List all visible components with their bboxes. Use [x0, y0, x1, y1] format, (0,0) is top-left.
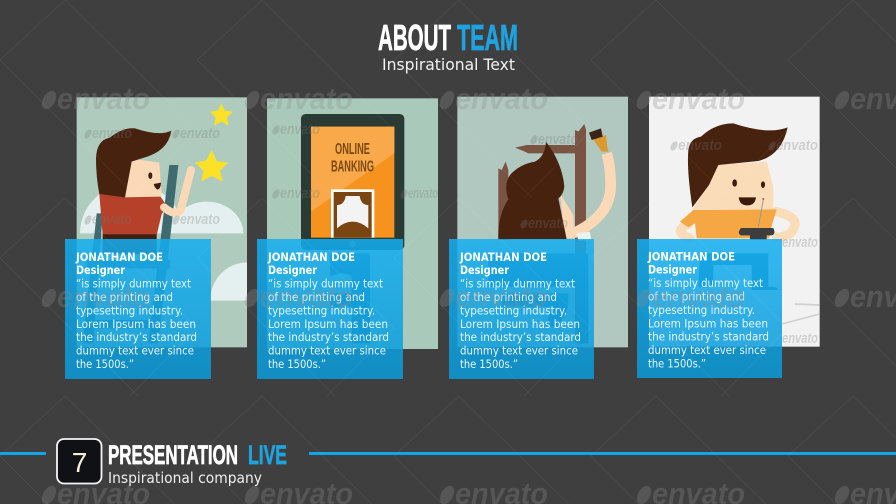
card 1: team member text: the 1500s.” — [76, 357, 134, 371]
card 2: team member text: typesetting industry. — [268, 304, 375, 318]
text: envato — [652, 279, 745, 314]
text: envato — [538, 131, 578, 148]
card 2: team member text: Designer — [268, 263, 317, 277]
text: envato — [455, 81, 548, 116]
page number badge: 7 — [72, 447, 87, 478]
footer company text: Inspirational company — [108, 469, 262, 487]
text: envato — [280, 121, 320, 138]
card 2: team member text: Lorem Ipsum has been — [268, 317, 388, 331]
card 4: team member text: dummy text ever since — [648, 343, 766, 357]
text: envato — [180, 125, 220, 142]
text: envato — [776, 137, 818, 154]
title: TEAM — [457, 17, 518, 58]
screen label: BANKING — [331, 159, 374, 176]
screen label: ONLINE — [335, 141, 370, 158]
text: envato — [678, 137, 722, 154]
card 3: team member text: the industry’s standard — [460, 330, 581, 344]
card 4: team member text — [637, 239, 782, 378]
card 4: team member text: of the printing and — [648, 290, 745, 304]
card 1: team member text: typesetting industry. — [76, 304, 183, 318]
card 3: team member text: the 1500s.” — [460, 357, 518, 371]
subtitle: Inspirational Text — [382, 55, 515, 74]
footer rule — [0, 452, 896, 455]
text: envato — [782, 330, 818, 347]
text: envato — [260, 81, 353, 116]
card 2: team member text: the industry’s standard — [268, 330, 389, 344]
card 3: team member text: Designer — [460, 263, 509, 277]
page number badge — [57, 439, 102, 484]
card 3: team member text: typesetting industry. — [460, 304, 567, 318]
card 1: team member text: Lorem Ipsum has been — [76, 317, 196, 331]
text: envato — [92, 211, 132, 228]
card 4: team member text: “is simply dummy text — [648, 276, 763, 290]
screen label — [331, 141, 374, 176]
card 1: team member text: of the printing and — [76, 290, 173, 304]
card 4: team member text: Lorem Ipsum has been — [648, 316, 768, 330]
card 4: team member text: the industry’s standard — [648, 330, 769, 344]
card 3: team member text: JONATHAN DOE — [459, 250, 547, 264]
card 4: team member text: the 1500s.” — [648, 356, 706, 370]
footer heading: LIVE — [248, 440, 287, 470]
panel: illustration man with remote control — [649, 97, 820, 347]
card 4: team member text: JONATHAN DOE — [647, 250, 735, 264]
card 1: team member text: JONATHAN DOE — [75, 250, 163, 264]
card 2: team member text: “is simply dummy text — [268, 276, 383, 290]
card 1: team member text: Designer — [76, 263, 125, 277]
text: envato — [57, 279, 150, 314]
panel: illustration man on ladder reaching for stars — [77, 97, 247, 347]
card 4: team member text: typesetting industry. — [648, 303, 755, 317]
card 3: team member text — [449, 239, 594, 379]
text: envato — [57, 81, 150, 116]
text: envato — [455, 279, 548, 314]
text: envato — [408, 185, 438, 202]
card 2: team member text: dummy text ever since — [268, 344, 386, 358]
text: envato — [652, 81, 745, 116]
panel: illustration tablet with online banking — [267, 98, 438, 349]
text: envato — [180, 211, 220, 228]
title: ABOUT — [378, 17, 451, 58]
card 4: team member text: Designer — [648, 262, 697, 276]
text: envato — [280, 185, 320, 202]
text: envato — [92, 125, 132, 142]
card 3: team member text: of the printing and — [460, 290, 557, 304]
text: envato — [528, 215, 568, 232]
card 2: team member text: JONATHAN DOE — [267, 250, 355, 264]
card 1: team member text — [65, 239, 211, 379]
card 2: team member text: of the printing and — [268, 290, 365, 304]
card 2: team member text — [257, 239, 403, 379]
footer heading: PRESENTATION — [108, 440, 238, 470]
card 3: team member text: Lorem Ipsum has been — [460, 317, 580, 331]
card 2: team member text: the 1500s.” — [268, 357, 326, 371]
card 1: team member text: the industry’s standard — [76, 330, 197, 344]
card 1: team member text: “is simply dummy text — [76, 276, 191, 290]
text: envato — [260, 279, 353, 314]
card 3: team member text: “is simply dummy text — [460, 276, 575, 290]
text: envato — [782, 234, 818, 251]
card 3: team member text: dummy text ever since — [460, 344, 578, 358]
panel: illustration man painting a frame from behind — [457, 97, 628, 347]
card 1: team member text: dummy text ever since — [76, 344, 194, 358]
